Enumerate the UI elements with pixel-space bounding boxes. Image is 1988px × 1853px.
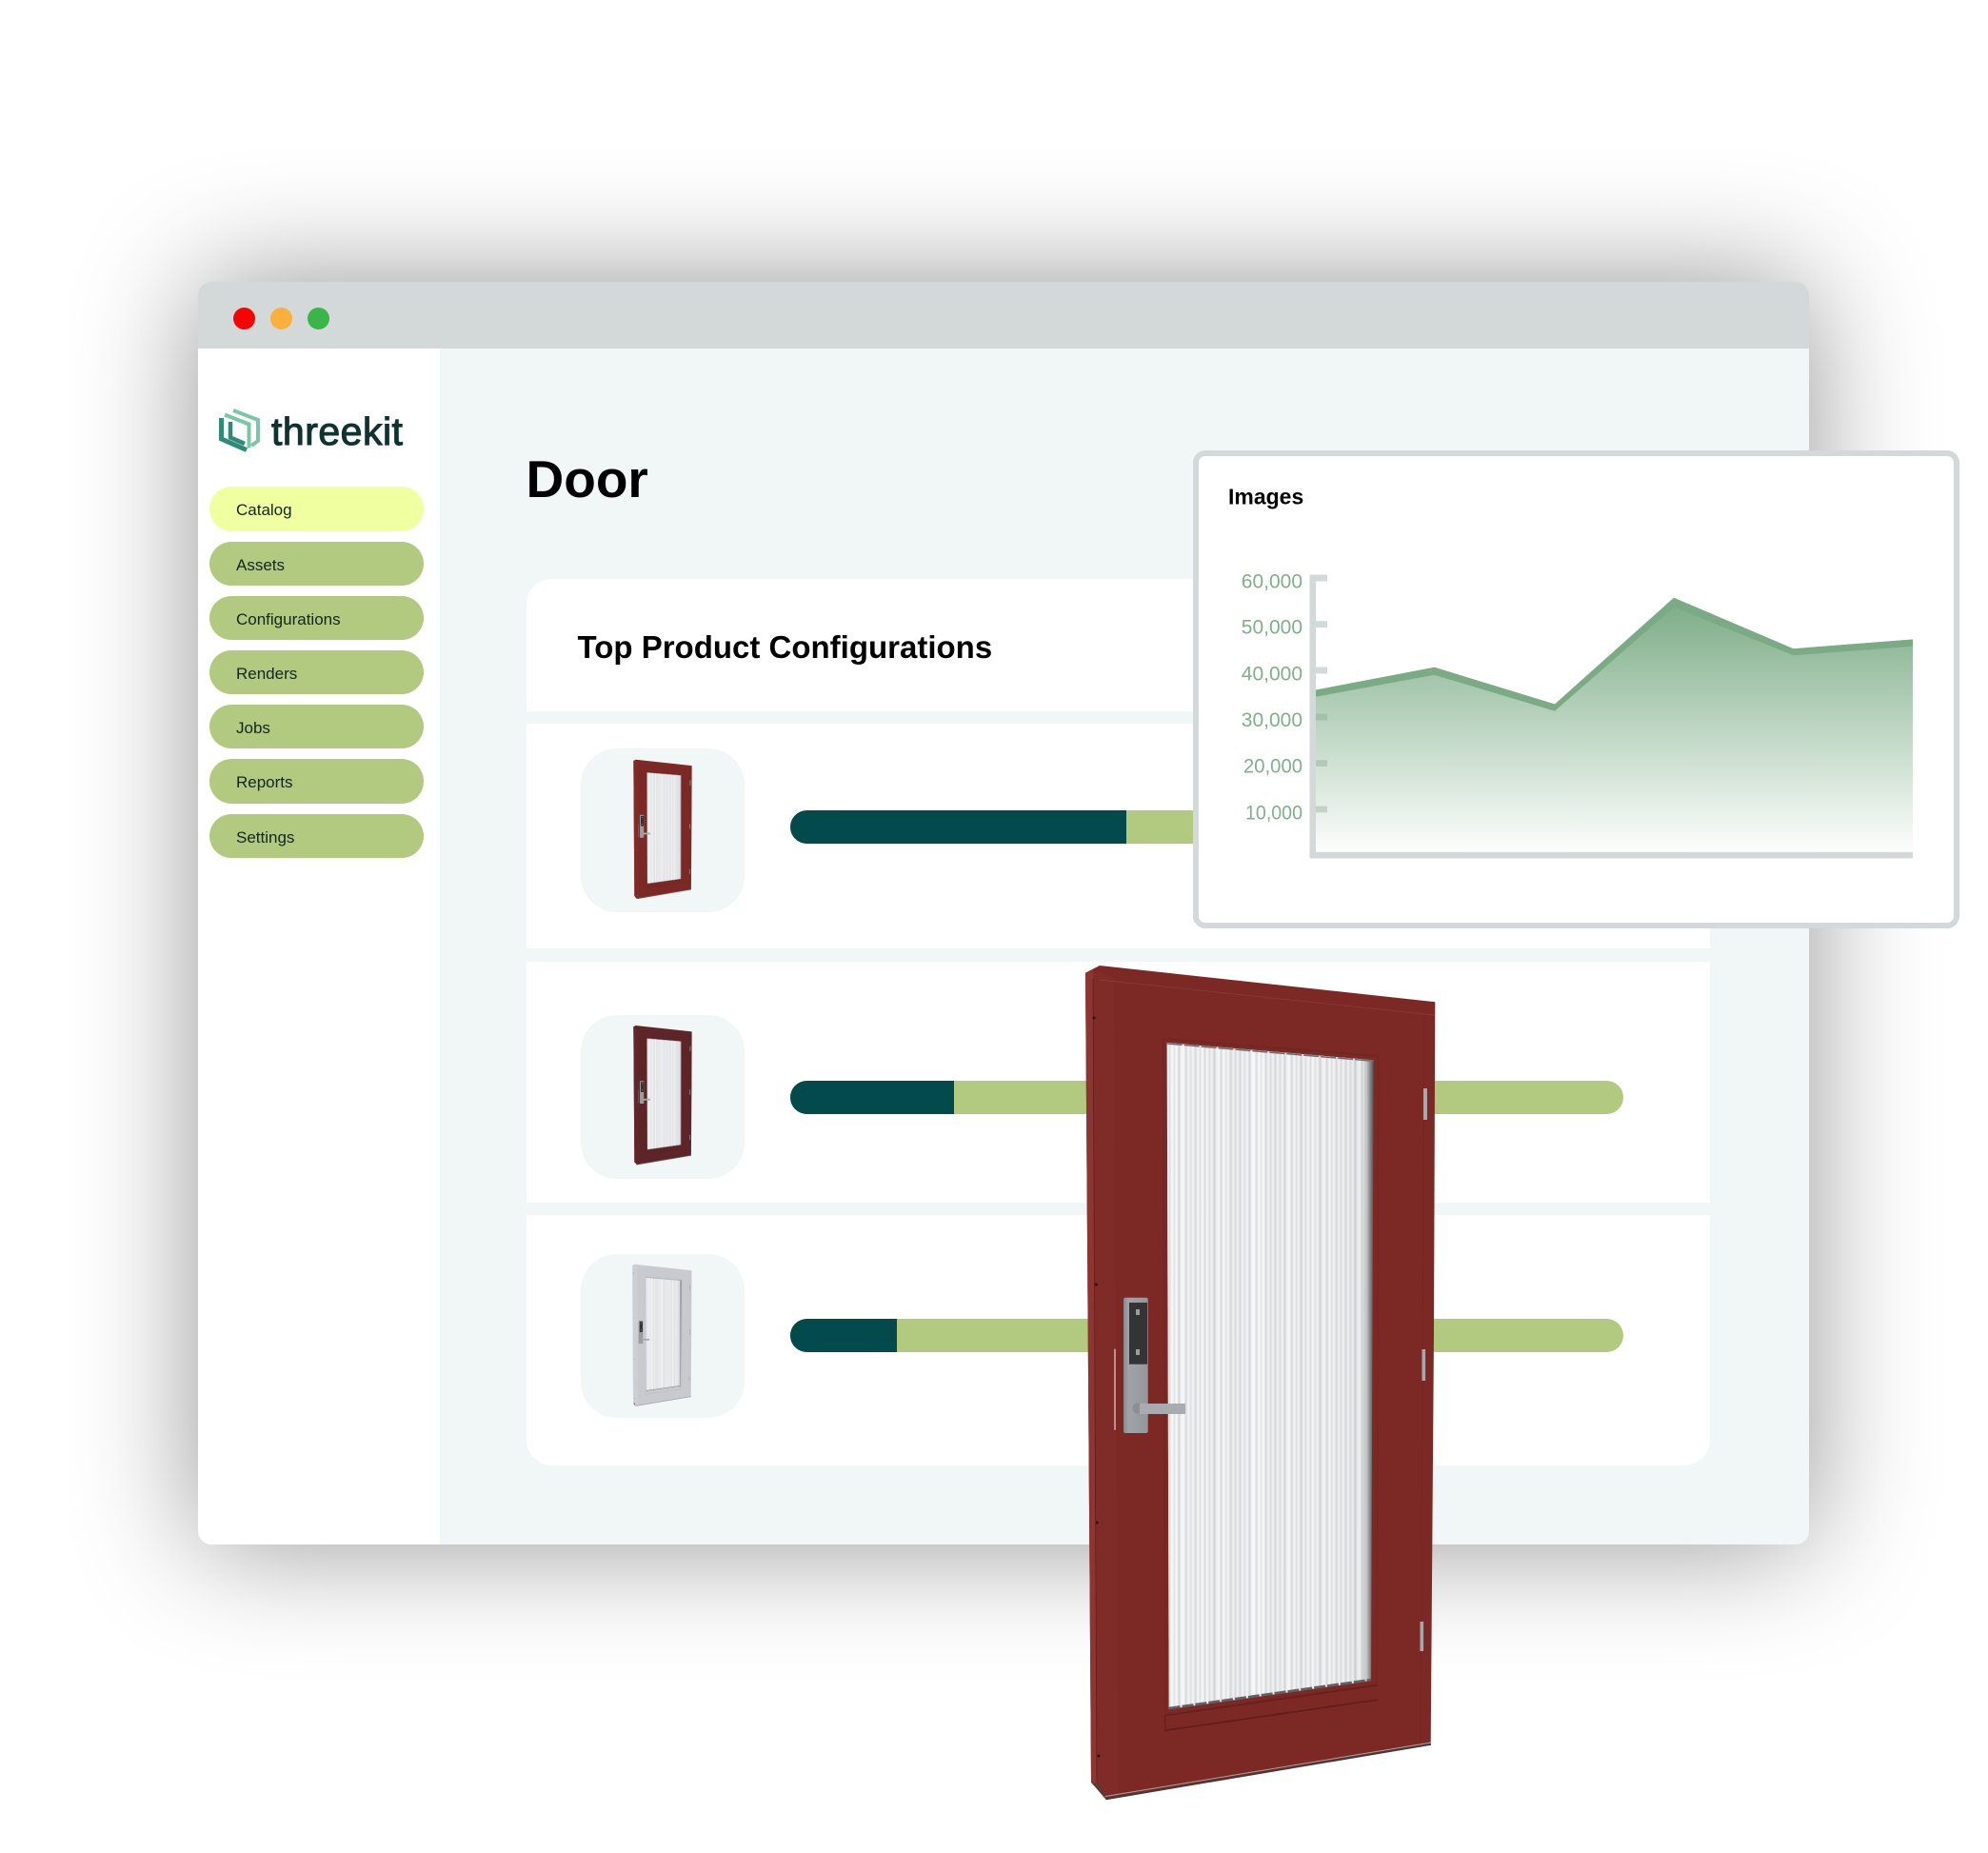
y axis labels: 50,000 xyxy=(1241,617,1302,638)
chart title: Images xyxy=(1228,484,1303,508)
nav: Jobs: Jobs xyxy=(236,718,270,737)
nav: Assets: Assets xyxy=(236,556,285,573)
close button xyxy=(233,308,255,329)
nav: Settings xyxy=(209,813,424,858)
y axis and ticks xyxy=(1309,575,1327,859)
navigation menu xyxy=(209,487,424,858)
window title bar xyxy=(198,282,1809,349)
thumbnail: maroon door xyxy=(581,1015,745,1179)
threekit logo xyxy=(219,408,404,453)
panel: images chart xyxy=(1193,449,1959,928)
y axis labels: 60,000 xyxy=(1241,571,1302,592)
panel header xyxy=(526,579,1710,710)
y axis labels xyxy=(1241,571,1302,825)
nav: Renders xyxy=(209,649,424,694)
nav: Renders: Renders xyxy=(236,665,297,682)
nav: Jobs xyxy=(209,705,424,748)
nav: Reports: Reports xyxy=(236,773,293,791)
thumbnail: grey door xyxy=(581,1254,745,1418)
page title: Door xyxy=(526,449,648,508)
logo icon xyxy=(219,408,260,452)
thumbnail: red door xyxy=(581,748,745,912)
panel heading: Top Product Configurations xyxy=(577,629,992,665)
sidebar xyxy=(198,349,440,1544)
browser window xyxy=(198,282,1809,1544)
progress bar 3 xyxy=(790,1319,1623,1352)
panel: top product configurations xyxy=(527,579,1710,1465)
logo wordmark: threekit xyxy=(271,409,403,453)
large red door xyxy=(1085,966,1436,1800)
main content xyxy=(526,449,1710,1465)
y axis labels: 20,000 xyxy=(1243,756,1302,777)
progress bar 1 xyxy=(790,810,1623,844)
nav: Configurations: Configurations xyxy=(236,609,341,628)
y axis labels: 30,000 xyxy=(1241,709,1302,731)
nav: Catalog xyxy=(209,487,424,531)
row 1: red door xyxy=(526,724,1710,948)
area chart fill xyxy=(1316,598,1912,853)
y axis labels: 40,000 xyxy=(1241,663,1302,686)
x axis xyxy=(1309,852,1912,859)
minimize button xyxy=(270,308,292,329)
area chart line xyxy=(1316,598,1912,711)
nav: Reports xyxy=(209,759,424,804)
progress bar 2 xyxy=(790,1081,1623,1114)
maximize button xyxy=(308,308,329,329)
row 3: grey door xyxy=(526,1215,1710,1465)
nav: Catalog: Catalog xyxy=(236,501,292,519)
nav: Settings: Settings xyxy=(236,828,294,846)
y axis labels: 10,000 xyxy=(1245,802,1302,825)
row 2: maroon door xyxy=(526,962,1710,1203)
nav: Configurations xyxy=(209,596,424,640)
nav: Assets xyxy=(209,541,424,586)
